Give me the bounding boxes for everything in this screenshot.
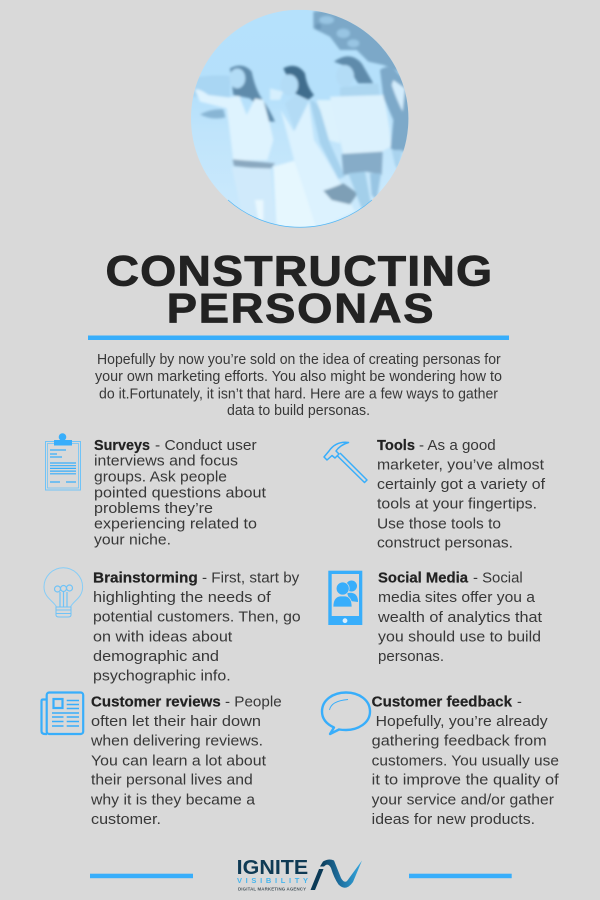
item: tools [377, 438, 546, 552]
item: surveys: - Conduct user [155, 438, 257, 454]
icon: newspaper [42, 692, 83, 734]
photo: four women walking on a beach, blue tint [190, 8, 413, 230]
item: brainstorming: - First, start by [202, 570, 300, 586]
item: brainstorming: highlighting the needs of [93, 590, 272, 606]
title: CONSTRUCTING [106, 247, 492, 295]
item: tools: tools at your fingertips. [377, 497, 537, 513]
item: tools: Tools [377, 438, 415, 454]
intro text [95, 352, 502, 419]
item: customer reviews: often let their hair down [91, 714, 261, 730]
title underline [88, 336, 509, 340]
intro text: Hopefully by now you’re sold on the idea of creating personas for [97, 352, 501, 368]
item: tools: - As a good [419, 438, 496, 454]
item: customer reviews: their personal lives and [91, 773, 253, 789]
intro text: data to build personas. [227, 403, 370, 419]
item: customer reviews: Customer reviews [91, 695, 221, 711]
item: customer reviews: when delivering reviews. [90, 734, 263, 750]
item: social media: wealth of analytics that [377, 610, 542, 626]
item: customer reviews [90, 695, 282, 828]
icon: light bulb [44, 568, 83, 617]
icon: hammer [324, 442, 367, 482]
item: brainstorming: demographic and [93, 649, 219, 665]
icon: speech bubble [322, 692, 370, 734]
item: customer reviews: customer. [91, 812, 161, 828]
item: brainstorming: Brainstorming [93, 570, 198, 586]
item: surveys: Surveys [94, 438, 150, 454]
item: brainstorming: on with ideas about [93, 629, 232, 645]
item: social media: media sites offer you a [378, 590, 536, 606]
item: tools: certainly got a variety of [377, 477, 546, 493]
logo: Ignite Visibility: DIGITAL MARKETING AGENCY [238, 886, 306, 892]
footer bar right [409, 874, 512, 878]
item: social media [377, 570, 542, 665]
item: customer reviews: why it is they became a [90, 792, 256, 808]
item: customer feedback: it to improve the quality of [372, 773, 560, 789]
item: tools: marketer, you’ve almost [377, 458, 544, 474]
item: customer reviews: You can learn a lot about [91, 753, 266, 769]
intro text: your own marketing efforts. You also might be wondering how to [95, 369, 502, 385]
item: customer feedback: ideas for new products. [372, 812, 535, 828]
item: customer feedback: - [517, 695, 522, 711]
item: surveys: your niche. [94, 532, 171, 548]
item: tools: Use those tools to [377, 516, 501, 532]
item: customer feedback: Hopefully, you’re already [376, 714, 549, 730]
item: social media: Social Media [378, 570, 469, 586]
item: customer feedback: your service and/or gather [372, 792, 554, 808]
title: PERSONAS [167, 285, 433, 332]
item: brainstorming: psychographic info. [93, 669, 231, 685]
item: surveys: experiencing related to [94, 517, 257, 533]
item: brainstorming [93, 570, 301, 685]
item: social media: - Social [473, 570, 523, 586]
intro text: do it.Fortunately, it isn’t that hard. Here are a few ways to gather [99, 386, 498, 402]
item: social media: personas. [378, 649, 444, 665]
item: customer feedback: gathering feedback from [372, 734, 547, 750]
item: customer feedback [372, 695, 560, 828]
icon: clipboard [46, 433, 80, 490]
logo: Ignite Visibility: IGNITE [237, 857, 308, 879]
title [106, 247, 492, 332]
item: surveys: groups. Ask people [94, 470, 227, 486]
icon: phone with people [328, 571, 362, 625]
item: customer feedback: Customer feedback [372, 695, 513, 711]
item: surveys: problems they’re [94, 501, 213, 517]
item: social media: you should use to build [378, 629, 541, 645]
item: tools: construct personas. [377, 536, 513, 552]
item: customer reviews: - People [225, 695, 282, 711]
logo: Ignite Visibility [237, 857, 362, 892]
item: surveys: interviews and focus [94, 454, 238, 470]
item: surveys: pointed questions about [94, 485, 266, 501]
item: brainstorming: potential customers. Then, go [93, 610, 301, 626]
item: customer feedback: customers. You usually use [372, 753, 559, 769]
item: surveys [94, 438, 266, 548]
logo: Ignite Visibility: VISIBILITY [237, 876, 308, 885]
footer bar left [90, 874, 193, 878]
